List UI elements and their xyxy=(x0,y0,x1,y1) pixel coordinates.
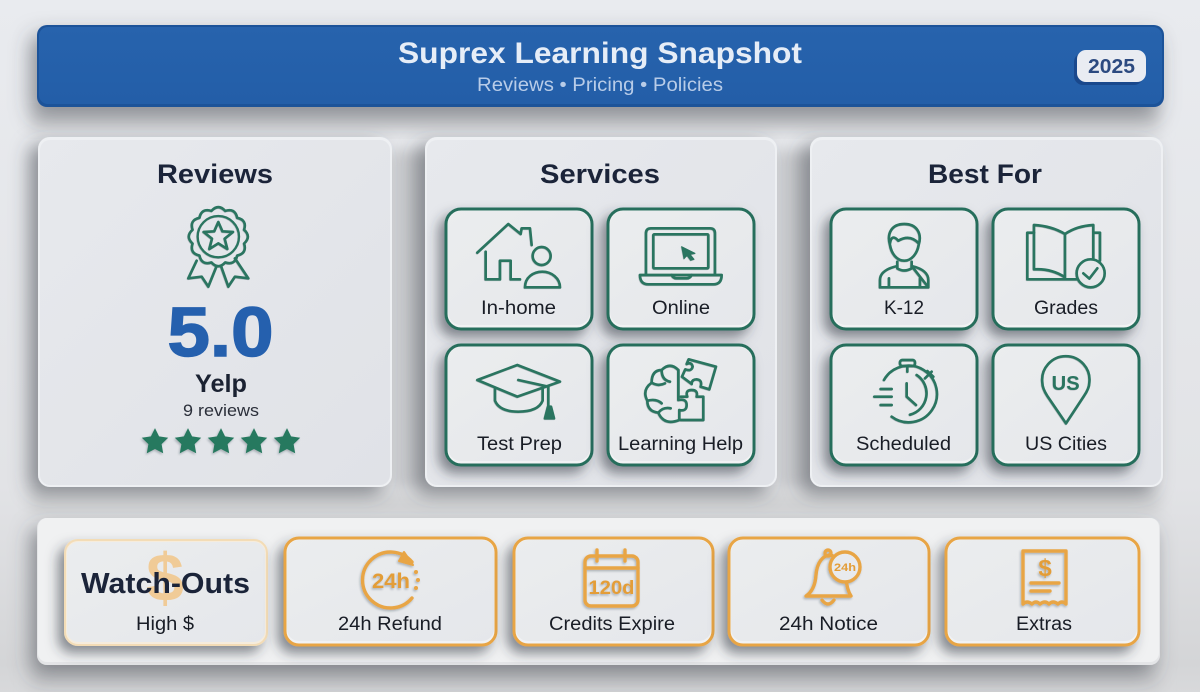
year badge xyxy=(1074,50,1146,85)
icon: bell with 24h xyxy=(806,550,860,604)
icon: student xyxy=(880,224,928,287)
panel: best for xyxy=(810,137,1163,487)
label: Credits Expire xyxy=(549,614,675,635)
panel: watch-outs xyxy=(37,518,1160,665)
icon: laptop with cursor xyxy=(640,228,722,284)
five stars xyxy=(142,428,300,453)
label: High $ xyxy=(136,614,194,635)
label: 24h Refund xyxy=(338,614,442,635)
label: Learning Help xyxy=(618,434,743,455)
year badge: 2025 xyxy=(1088,56,1135,78)
label: Online xyxy=(652,298,710,319)
icon: open book with check xyxy=(1027,225,1105,287)
label: US Cities xyxy=(1025,434,1107,455)
header banner xyxy=(37,25,1164,107)
icon: award rosette xyxy=(188,207,248,287)
card: high price xyxy=(65,540,267,645)
card: us cities xyxy=(993,345,1139,465)
label: Extras xyxy=(1016,614,1072,635)
icon: map pin xyxy=(1042,356,1089,423)
card: extras xyxy=(946,538,1139,645)
card: credits expire xyxy=(514,538,713,645)
heading: best for: Best For xyxy=(928,159,1042,189)
heading: reviews: Reviews xyxy=(157,159,273,189)
source label: Yelp xyxy=(195,370,247,398)
card: 24h refund xyxy=(285,538,496,645)
panel: services xyxy=(425,137,777,487)
icon: receipt: $ xyxy=(1038,555,1052,582)
icon: 24h refund arrow: 24h xyxy=(372,570,410,593)
icon: dollar sign: $ xyxy=(146,540,184,616)
icon: brain and puzzle xyxy=(645,359,716,422)
icon: map pin: US xyxy=(1052,372,1080,395)
card: in-home xyxy=(446,209,592,329)
icon: calendar 120d: 120d xyxy=(588,578,634,599)
review count: 9 reviews xyxy=(183,401,259,420)
card: 24h notice xyxy=(729,538,929,645)
panel: reviews xyxy=(38,137,392,487)
card: test prep xyxy=(446,345,592,465)
icon: receipt xyxy=(1023,551,1066,604)
label: 24h Notice xyxy=(779,614,878,635)
label: Grades xyxy=(1034,298,1098,319)
card: online xyxy=(608,209,754,329)
card: scheduled xyxy=(831,345,977,465)
icon: house and person xyxy=(477,224,560,287)
label: Scheduled xyxy=(856,434,951,455)
card: k-12 xyxy=(831,209,977,329)
icon: 24h refund arrow xyxy=(363,552,420,608)
label: K-12 xyxy=(884,298,924,319)
icon: bell with 24h: 24h xyxy=(834,562,856,574)
icon: graduation cap xyxy=(477,365,560,418)
icon: calendar 120d xyxy=(585,550,638,606)
label: Test Prep xyxy=(477,434,562,455)
card: learning help xyxy=(608,345,754,465)
heading: services: Services xyxy=(540,159,660,189)
title: Suprex Learning Snapshot xyxy=(398,37,802,70)
icon: stopwatch xyxy=(874,360,937,422)
card: grades xyxy=(993,209,1139,329)
heading: watch-outs: Watch-Outs xyxy=(81,568,250,600)
label: In-home xyxy=(481,298,556,319)
subtitle: Reviews • Pricing • Policies xyxy=(477,75,723,96)
rating value: 5.0 xyxy=(168,293,274,371)
